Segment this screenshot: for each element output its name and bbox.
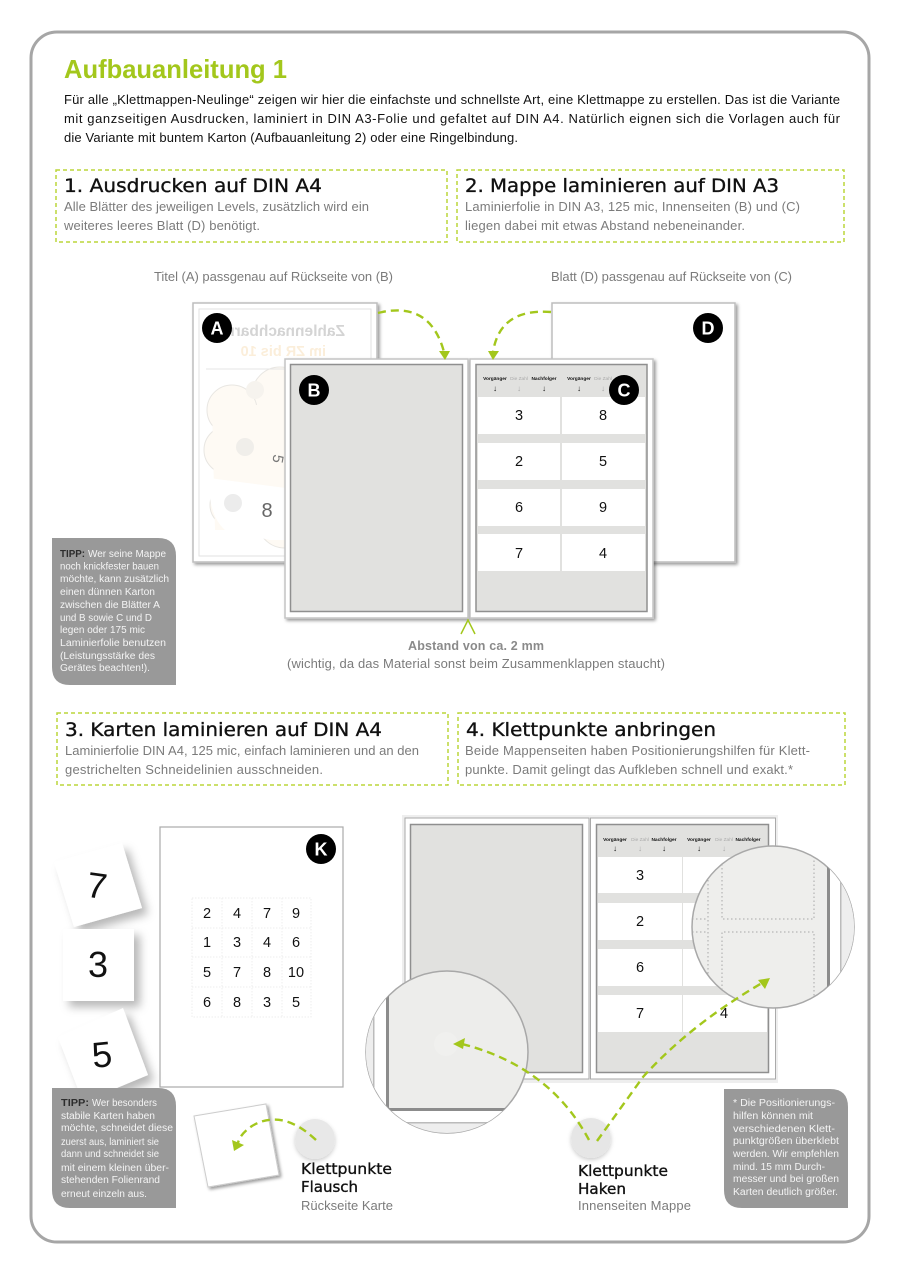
open folder: 2: [636, 914, 644, 930]
intro text: Für alle „Klettmappen-Neulinge“ zeigen wir hier die einfachste und schnellste Art, eine Klettmappe zu erstellen. Das ist die Variante: [64, 92, 840, 107]
step 3 box: 3. Karten laminieren auf DIN A4: [65, 719, 382, 741]
sheet K with cards: 5: [292, 995, 300, 1011]
label Klettpunkte Flausch: Klettpunkte: [301, 1160, 392, 1178]
tip 1: (Leistungsstärke des: [60, 651, 155, 662]
open folder: 3: [636, 868, 644, 884]
sheet K with cards: 7: [263, 906, 271, 922]
sheet D blank: [552, 303, 735, 562]
sheet K with cards: 8: [233, 995, 241, 1011]
tip 1: [52, 538, 176, 685]
open folder: ↓: [613, 844, 617, 853]
gap caption: [287, 639, 665, 671]
open folder: ↓: [638, 844, 642, 853]
open folder: ↓: [722, 844, 726, 853]
magnifier right: [691, 845, 855, 1009]
sheet K with cards: 5: [203, 965, 211, 981]
sheet A mirrored title page: 5: [268, 453, 287, 464]
sheet C number table: Die Zahl: [594, 376, 612, 382]
label Klettpunkte Flausch: Flausch: [301, 1178, 358, 1196]
tip 2: stehenden Folienrand: [61, 1175, 160, 1186]
sheet C number table: 7: [515, 546, 523, 562]
tip 1: Wer seine Mappe: [88, 549, 166, 560]
footnote: messer und bei großen: [733, 1174, 839, 1185]
label Klettpunkte Haken: Haken: [578, 1180, 626, 1198]
label Klettpunkte Haken: Innenseiten Mappe: [578, 1198, 691, 1213]
sheet C number table: 5: [599, 454, 607, 470]
step 4 box: punkte. Damit gelingt das Aufkleben schnell und exakt.*: [465, 762, 793, 777]
sheet K with cards: 9: [292, 906, 300, 922]
tip 2: TIPP:: [61, 1098, 89, 1109]
footnote: [724, 1089, 848, 1208]
sheet C number table: Die Zahl: [510, 376, 528, 382]
open folder: [402, 815, 778, 1083]
sheet C number table: 8: [599, 408, 607, 424]
sheet C number table: [470, 359, 653, 618]
velcro dot hook: [571, 1118, 611, 1158]
open folder: Vorgänger: [687, 837, 711, 843]
tip 2: stabile Karten haben: [61, 1111, 155, 1122]
open folder: Nachfolger: [735, 837, 761, 843]
sheet K with cards: 4: [263, 935, 271, 951]
step 1 box: [56, 170, 447, 242]
badge C: [609, 375, 639, 405]
tip 2: dann und schneidet sie: [61, 1149, 159, 1160]
sheet A mirrored title page: 8: [261, 500, 273, 522]
footnote: verschiedenen Klett-: [733, 1124, 835, 1135]
badge D: [693, 313, 723, 343]
footnote: punktgrößen überklebt: [733, 1136, 839, 1147]
arrow hook to right page: [597, 978, 770, 1141]
tip 1: TIPP:: [60, 549, 85, 560]
badge D: D: [702, 318, 714, 338]
sheet K with cards: 3: [263, 995, 271, 1011]
label Klettpunkte Haken: Klettpunkte: [578, 1162, 668, 1180]
sheet B grey inside: [285, 359, 468, 618]
sheet C number table: ↓: [493, 384, 497, 393]
title: Aufbauanleitung 1: [64, 54, 287, 84]
sheet K with cards: 7: [233, 965, 241, 981]
step 1 box: Alle Blätter des jeweiligen Levels, zusätzlich wird ein: [64, 199, 369, 214]
open folder: Die Zahl: [631, 837, 649, 843]
sheet C number table: Nachfolger: [531, 376, 557, 382]
step 2 box: [457, 170, 844, 242]
small card back: [194, 1104, 279, 1187]
tip 2: [52, 1088, 176, 1208]
tip 2: erneut einzeln aus.: [61, 1189, 147, 1200]
badge A: [202, 313, 232, 343]
sheet K with cards: 4: [233, 906, 241, 922]
step 4 box: 4. Klettpunkte anbringen: [466, 719, 716, 741]
sheet C number table: ↓: [577, 384, 581, 393]
sheet C number table: 3: [515, 408, 523, 424]
card 5: 5: [90, 1033, 114, 1076]
badge C: C: [618, 380, 630, 400]
sheet C number table: 9: [599, 500, 607, 516]
intro text: die Variante mit buntem Karton (Aufbauanleitung 2) oder eine Ringelbindung.: [64, 130, 518, 145]
tip 2: zuerst aus, laminiert sie: [61, 1137, 159, 1148]
gap caption: Abstand von ca. 2 mm: [408, 639, 544, 653]
sheet A mirrored title page: Zahlennachbarn: [225, 323, 345, 340]
arrow fleece to card: [232, 1120, 316, 1151]
step 1 box: 1. Ausdrucken auf DIN A4: [64, 175, 322, 197]
badge K: K: [314, 840, 328, 860]
step 1 box: weiteres leeres Blatt (D) benötigt.: [63, 218, 260, 233]
footnote: Karten deutlich größer.: [733, 1187, 838, 1198]
intro text: mit ganzseitigen Ausdrucken, laminiert in DIN A3-Folie und gefaltet auf DIN A4. Natürlich eignen sich die Vorlagen auch für: [64, 111, 841, 126]
arrow hook to left page: [453, 1038, 589, 1140]
caption D to C: Blatt (D) passgenau auf Rückseite von (C): [551, 269, 792, 284]
card 5: [58, 1008, 148, 1102]
tip 2: mit einem kleinen über-: [61, 1163, 169, 1174]
sheet C number table: Vorgänger: [567, 376, 591, 382]
tip 1: zwischen die Blätter A: [60, 600, 160, 611]
open folder: Vorgänger: [603, 837, 627, 843]
sheet A mirrored title page: im ZR bis 10: [241, 344, 326, 360]
card 7: 7: [84, 864, 110, 907]
sheet A mirrored title page: [193, 303, 377, 562]
open folder: ↓: [697, 844, 701, 853]
sheet K with cards: 3: [233, 935, 241, 951]
open folder: Nachfolger: [651, 837, 677, 843]
tip 1: Laminierfolie benutzen: [60, 638, 166, 649]
label Klettpunkte Flausch: [301, 1160, 393, 1213]
step 3 box: Laminierfolie DIN A4, 125 mic, einfach laminieren und an den: [65, 743, 419, 758]
tip 1: und B sowie C und D: [60, 613, 152, 624]
step 4 box: [458, 713, 845, 785]
step 4 box: Beide Mappenseiten haben Positionierungshilfen für Klett-: [465, 743, 810, 758]
step 3 box: [57, 713, 448, 785]
label Klettpunkte Haken: [578, 1162, 691, 1213]
footnote: * Die Positionierungs-: [733, 1098, 835, 1109]
sheet K with cards: 1: [203, 935, 211, 951]
sheet K with cards: 8: [263, 965, 271, 981]
caption A to B: Titel (A) passgenau auf Rückseite von (B): [154, 269, 393, 284]
badge K: [306, 834, 336, 864]
footnote: werden. Wir empfehlen: [732, 1149, 839, 1160]
sheet C number table: Vorgänger: [483, 376, 507, 382]
intro text: [64, 92, 841, 145]
step 2 box: 2. Mappe laminieren auf DIN A3: [465, 175, 779, 197]
gap caption: (wichtig, da das Material sonst beim Zusammenklappen staucht): [287, 656, 665, 671]
sheet C number table: ↓: [542, 384, 546, 393]
badge B: B: [308, 380, 320, 400]
open folder: 6: [636, 960, 644, 976]
gap marker: [461, 620, 475, 634]
tip 2: möchte, schneidet diese: [61, 1123, 173, 1134]
sheet K with cards: 10: [288, 965, 304, 981]
arrow A to B: [378, 310, 450, 360]
badge B: [299, 375, 329, 405]
step 2 box: Laminierfolie in DIN A3, 125 mic, Innenseiten (B) und (C): [465, 199, 800, 214]
footnote: hilfen können mit: [733, 1111, 813, 1122]
sheet K with cards: 2: [203, 906, 211, 922]
footnote: mind. 15 mm Durch-: [733, 1162, 825, 1173]
open folder: 4: [720, 1006, 728, 1022]
sheet C number table: 2: [515, 454, 523, 470]
tip 1: möchte, kann zusätzlich: [60, 574, 169, 585]
tip 1: noch knickfester bauen: [60, 562, 159, 572]
card 7: [54, 843, 142, 927]
open folder: Die Zahl: [715, 837, 733, 843]
step 2 box: liegen dabei mit etwas Abstand nebeneinander.: [465, 218, 745, 233]
tip 1: einen dünnen Karton: [60, 587, 155, 598]
tip 1: legen oder 175 mic: [60, 625, 145, 636]
open folder: ↓: [662, 844, 666, 853]
open folder: 7: [636, 1006, 644, 1022]
sheet C number table: ↓: [601, 384, 605, 393]
card 3: [63, 929, 134, 1001]
card 3: 3: [88, 944, 108, 985]
label Klettpunkte Flausch: Rückseite Karte: [301, 1198, 393, 1213]
step 3 box: gestrichelten Schneidelinien ausschneiden.: [65, 762, 323, 777]
sheet K with cards: [160, 827, 343, 1087]
tip 1: Gerätes beachten!).: [60, 663, 150, 674]
sheet K with cards: 6: [203, 995, 211, 1011]
velcro dot fleece: [295, 1119, 335, 1159]
sheet C number table: 4: [599, 546, 607, 562]
magnifier left: [365, 970, 529, 1134]
sheet K with cards: 6: [292, 935, 300, 951]
arrow D to C: [488, 312, 551, 360]
sheet C number table: ↓: [517, 384, 521, 393]
sheet C number table: 6: [515, 500, 523, 516]
tip 2: Wer besonders: [92, 1098, 157, 1109]
badge A: A: [210, 318, 224, 338]
